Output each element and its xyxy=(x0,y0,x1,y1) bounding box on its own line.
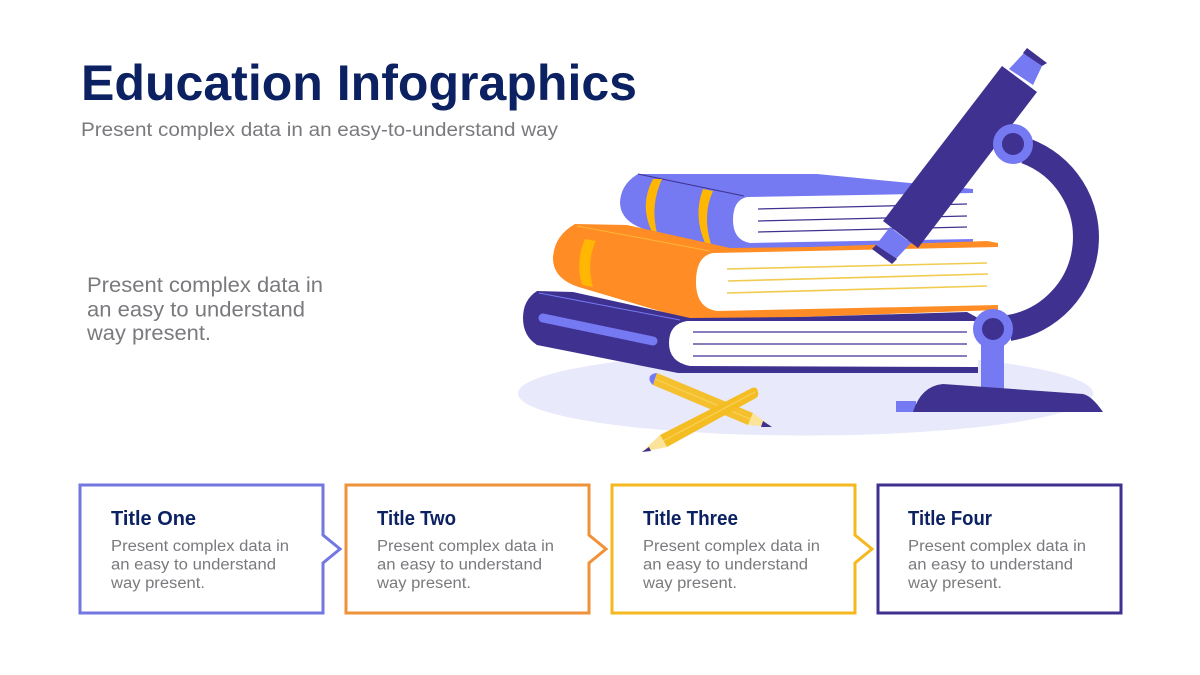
card: title three xyxy=(612,485,872,613)
book: orange middle xyxy=(553,224,998,320)
text block: intro: way present. xyxy=(86,322,211,345)
card: title four: way present. xyxy=(907,575,1002,592)
microscope foot xyxy=(896,401,916,412)
microscope arm xyxy=(1009,151,1086,328)
card: title one xyxy=(80,485,340,613)
subtitle: Present complex data in an easy-to-understand way xyxy=(81,120,559,141)
card: title four: an easy to understand xyxy=(908,556,1073,574)
card: title two: way present. xyxy=(376,575,471,592)
book: dark bottom xyxy=(523,291,978,373)
card: title two: an easy to understand xyxy=(377,556,542,574)
card: title four: Present complex data in xyxy=(908,538,1086,555)
icon: pencil one xyxy=(649,373,772,427)
card: title two xyxy=(346,485,606,613)
microscope base xyxy=(913,384,1103,412)
microscope objective xyxy=(876,227,911,260)
icon: microscope xyxy=(872,48,1103,412)
card: title three: way present. xyxy=(642,575,737,592)
card: title two: Title Two xyxy=(377,508,456,530)
shadow ellipse xyxy=(518,352,1093,436)
card: title two: Present complex data in xyxy=(377,538,554,555)
book: periwinkle top xyxy=(620,174,973,251)
card: title one: Title One xyxy=(111,508,196,530)
title: Education Infographics xyxy=(81,55,637,111)
text block: intro: Present complex data in xyxy=(87,274,323,297)
microscope eyepiece xyxy=(1009,53,1042,85)
card: title three: Title Three xyxy=(643,508,738,530)
card: title one: Present complex data in xyxy=(111,538,289,555)
card: title one: an easy to understand xyxy=(111,556,276,574)
upper ring xyxy=(998,128,1028,160)
card: title four: Title Four xyxy=(908,508,992,530)
card: title three: an easy to understand xyxy=(643,556,808,574)
card: title four xyxy=(878,485,1121,613)
text block: intro xyxy=(86,274,323,345)
icon: pencil two xyxy=(642,388,758,452)
card: title one: way present. xyxy=(110,575,205,592)
microscope tube xyxy=(883,66,1037,248)
card: title three: Present complex data in xyxy=(643,538,820,555)
microscope pillar xyxy=(981,340,1004,392)
illustration: books and microscope xyxy=(518,48,1103,452)
lower ring xyxy=(978,314,1008,344)
text block: intro: an easy to understand xyxy=(87,298,305,322)
